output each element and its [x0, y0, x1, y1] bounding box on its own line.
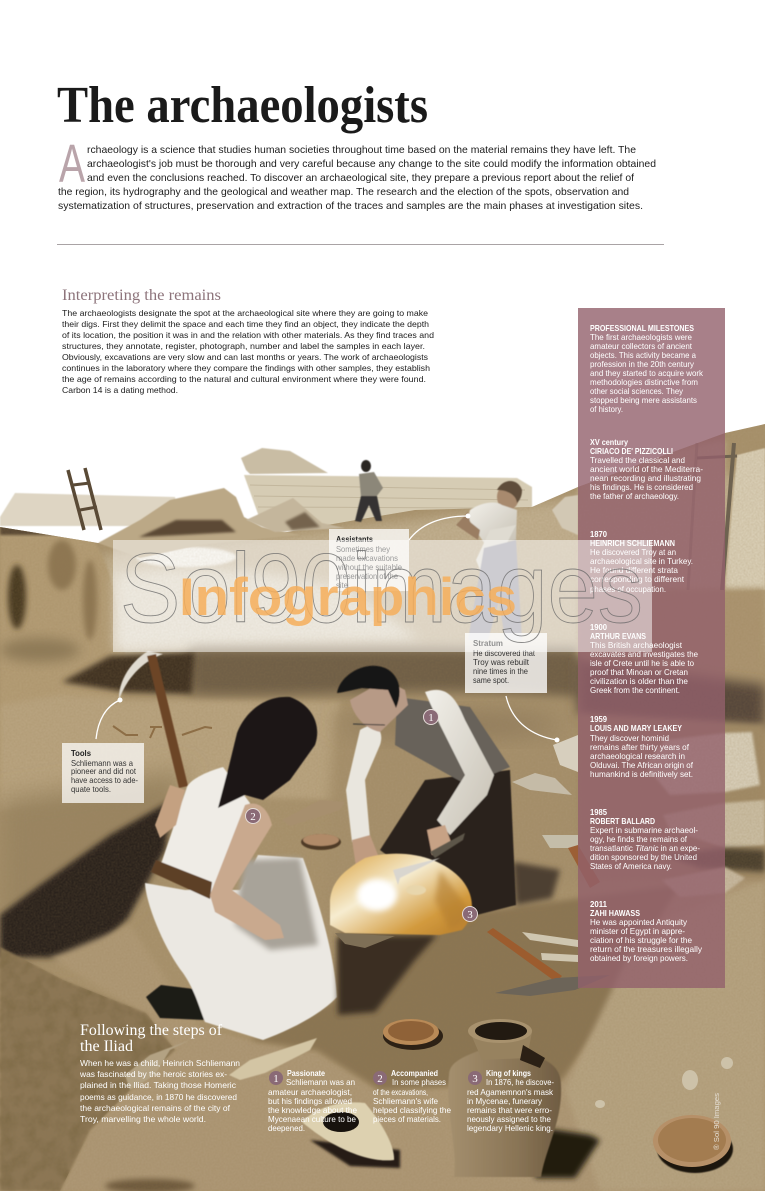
section text: interpreting the remains: Carbon 14 is a dating method.: [62, 385, 178, 395]
milestone: professional: PROFESSIONAL MILESTONES: [590, 323, 694, 333]
milestone: 1985: Expert in submarine archaeol-: [590, 825, 698, 835]
golden mask: [330, 833, 475, 935]
milestone: professional: profession in the 20th century: [590, 359, 695, 369]
milestone: 1900: Greek from the continent.: [590, 685, 680, 695]
milestone: 1985: transatlantic Titanic in an expe-: [590, 843, 700, 853]
milestone: 2011: ZAHI HAWASS: [590, 908, 640, 918]
section text: following the steps: plained in the Iliad. Taking those Homeric: [80, 1080, 236, 1090]
note 1: passionate: but his findings allowed: [268, 1096, 352, 1106]
milestone: 1900: This British archaeologist: [590, 640, 683, 650]
section heading: following the steps of the Iliad: Following the steps of: [80, 1022, 223, 1039]
note 3: king of kings: red Agamemnon's mask: [467, 1087, 554, 1097]
ladder left: [68, 468, 101, 530]
note 2: accompanied: Accompanied: [391, 1069, 438, 1078]
section text: following the steps: the archaeological remains of the city of: [80, 1103, 231, 1113]
plate right: [653, 1115, 733, 1173]
near sand: [0, 695, 340, 810]
right background: [725, 448, 765, 592]
note 2: accompanied: helped classifying the: [373, 1105, 451, 1115]
hammer bottom: [487, 928, 610, 996]
note 1: passionate: 1: [273, 1073, 279, 1085]
milestone: 1870: corresponding to different: [590, 574, 685, 584]
milestone: 1959: humankind is definitively set.: [590, 769, 693, 779]
pale sand behind watermark: [115, 569, 420, 650]
milestone: 1985: ROBERT BALLARD: [590, 816, 655, 826]
watermark: Sol90images: [120, 533, 643, 643]
callout: tools: Tools: [71, 748, 91, 758]
note 3: king of kings: legendary Hellenic king.: [467, 1123, 553, 1133]
drop cap: A: [59, 134, 85, 194]
callout: stratum: Troy was rebuilt: [473, 657, 530, 667]
mid ground: [328, 696, 570, 800]
section text: interpreting the remains: The archaeologists designate the spot at the archaeological site where they are going to make: [62, 308, 428, 318]
milestone: professional: other social sciences. They: [590, 386, 684, 396]
milestone: 1985: ogy, he finds the remains of: [590, 834, 688, 844]
note 1: passionate: Passionate: [287, 1069, 325, 1078]
top rock: [241, 448, 328, 474]
stone wall: [244, 475, 532, 528]
milestone: 1900: [590, 622, 698, 695]
milestone: 1870: He discovered Troy at an: [590, 547, 676, 557]
badge 2: [246, 808, 260, 824]
milestone: 1959: archaeological research in: [590, 751, 685, 761]
intro text block: rchaeology is a science that studies human societies throughout time based on the material remains they have left. The: [87, 144, 636, 156]
milestone: 1985: 1985: [590, 807, 607, 817]
callout: stratum: Stratum: [473, 638, 503, 648]
callout: tools: have access to ade-: [71, 775, 138, 785]
milestone: XV century: nean recording and illustrating: [590, 473, 701, 483]
intro text block: [58, 134, 656, 212]
callout: assistants: Assistants: [336, 534, 373, 544]
section text: interpreting the remains: of its location, the position it was in and the relation with other materials. As they find traces and: [62, 330, 434, 340]
milestone: 1870: [590, 529, 693, 594]
intro text block: systematization of structures, preservation and extraction of the traces and samples are the main phases at investigation sites.: [58, 200, 643, 212]
intro text block: and even the conclusions reached. To discover an archaeological site, they prepare a previous report about the relief of: [87, 172, 634, 184]
milestone: 2011: obtained by foreign powers.: [590, 953, 688, 963]
note 3: king of kings: King of kings: [486, 1069, 531, 1078]
callout: assistants: preservation of the: [336, 571, 398, 581]
milestone: 2011: 2011: [590, 899, 607, 909]
milestone: professional: methodologies distinctive from: [590, 377, 698, 387]
milestone: professional: amateur collectors of ancient: [590, 341, 693, 351]
dune left: [1, 527, 122, 702]
milestone: 1870: phases of occupation.: [590, 584, 666, 594]
milestone: 1870: He found different strata: [590, 565, 678, 575]
badge 2: 2: [250, 811, 256, 823]
note 2: accompanied: of the excavations,: [373, 1087, 428, 1097]
section text: interpreting the remains: continues in the laboratory where they compare the findings with other samples, they establish: [62, 363, 430, 373]
milestone: 1900: civilization is older than the: [590, 676, 688, 686]
pickaxe: [119, 651, 188, 788]
section text: interpreting the remains: structures, they annotate, register, photograph, number and label the samples in each layer.: [62, 341, 425, 351]
milestone: 1900: 1900: [590, 622, 607, 632]
right ladder: [688, 443, 737, 590]
intro text block: archaeologist's job must be thorough and very careful because any change to the site could modify the information obtained: [87, 158, 656, 170]
hammer right: [542, 835, 600, 888]
section text: interpreting the remains: Obviously, excavations are very slow and can last months or years. The work of archaeologists: [62, 352, 428, 362]
milestone: XV century: CIRIACO DE' PIZZICOLLI: [590, 446, 673, 456]
bottom bowl: [383, 1019, 443, 1050]
small worker at wall: [355, 460, 383, 522]
note 2: accompanied: 2: [377, 1073, 383, 1085]
lower sand: [158, 1024, 197, 1036]
note 3: king of kings: In 1876, he discove-: [486, 1077, 554, 1087]
milestone: 1959: [590, 714, 694, 779]
note 2: accompanied: In some phases: [392, 1077, 446, 1087]
callout: stratum: nine times in the: [473, 666, 528, 676]
woman archaeologist: [145, 697, 337, 1040]
note 2: accompanied: pieces of materials.: [373, 1114, 441, 1124]
milestone: 1870: HEINRICH SCHLIEMANN: [590, 538, 675, 548]
watermark: Infographics: [179, 568, 517, 627]
note 1: passionate: [268, 1069, 357, 1133]
copyright credit: ® Sol 90 Images: [712, 1093, 721, 1150]
section heading: following the steps of the Iliad: the Iliad: [80, 1038, 133, 1055]
milestone: XV century: his findings. He is considered: [590, 482, 693, 492]
note 1: passionate: Schliemann was an: [286, 1077, 355, 1087]
callout: assistants: made excavations: [336, 553, 398, 563]
section text: following the steps: [79, 1058, 240, 1124]
standing worker: [456, 481, 578, 640]
milestone: 1985: [590, 807, 700, 871]
excavation scene illustration: [0, 420, 765, 1191]
section text: following the steps: Troy, marvelling the whole world.: [80, 1114, 206, 1124]
textured dark ground: [253, 897, 614, 1092]
milestone: professional: The first archaeologists were: [590, 332, 692, 342]
milestone: XV century: the father of archaeology.: [590, 491, 679, 501]
callout: assistants: [329, 514, 470, 591]
ground: [0, 420, 765, 1191]
note 3: king of kings: in Mycenae, funerary: [467, 1096, 543, 1106]
callout: tools: Schliemann was a: [71, 758, 133, 768]
section text: interpreting the remains: the age of remains according to the natural and cultural environment where they were found.: [62, 374, 426, 384]
milestone: 2011: He was appointed Antiquity: [590, 917, 688, 927]
section text: interpreting the remains: their digs. First they delimit the space and each time they find an object, they indicate the depth: [62, 319, 429, 329]
milestone: 1900: ARTHUR EVANS: [590, 631, 646, 641]
callout: tools: [62, 698, 144, 803]
milestone: 1959: Olduvai. The African origin of: [590, 760, 694, 770]
milestone: XV century: Travelled the classical and: [590, 455, 685, 465]
stratum rock: [553, 735, 578, 772]
milestone: 2011: ciation of his struggle for the: [590, 935, 692, 945]
clay jar: [448, 1019, 600, 1178]
section text: interpreting the remains: [62, 308, 434, 395]
note 3: king of kings: 3: [472, 1073, 478, 1085]
milestone: 1959: They discover hominid: [590, 733, 669, 743]
milestone: 2011: return of the treasures illegally: [590, 944, 703, 954]
milestone: 1900: isle of Crete until he is able to: [590, 658, 694, 668]
section heading: following the steps of the Iliad: [80, 1022, 223, 1055]
title: The archaeologists: [57, 77, 428, 134]
callout: stratum: [465, 633, 560, 742]
note 1: passionate: deepened.: [268, 1123, 305, 1133]
callout: tools: quate tools.: [71, 784, 111, 794]
shadows near figures: [337, 862, 560, 1015]
badge 1: [424, 710, 438, 724]
section text: following the steps: poems as guidance, in 1870 he discovered: [80, 1092, 237, 1102]
note 3: king of kings: neously assigned to the: [467, 1114, 551, 1124]
callout: tools: pioneer and did not: [71, 766, 137, 776]
milestone: XV century: [590, 437, 703, 501]
note 1: passionate: Mycenaean culture to be: [268, 1114, 356, 1124]
tools right: [522, 932, 578, 962]
milestone: 2011: [590, 899, 703, 963]
note 1: passionate: amateur archaeologist,: [268, 1087, 352, 1097]
intro text block: the region, its hydrography and the geological and weather map. The research and the election of the spots, observation and: [58, 186, 629, 198]
milestone: 1959: remains after thirty years of: [590, 742, 690, 752]
rock left: [98, 488, 300, 558]
note 2: accompanied: Schliemann's wife: [373, 1096, 438, 1106]
note 1: passionate: the knowledge about the: [268, 1105, 357, 1115]
note 2: accompanied: [373, 1069, 451, 1124]
dark bands: [190, 648, 580, 700]
milestone: 1900: proof that Minoan or Cretan: [590, 667, 688, 677]
milestone: 1870: 1870: [590, 529, 607, 539]
figurine and plate: [282, 800, 345, 850]
rubble by mask: [335, 933, 395, 948]
milestone: 1870: archaeological site in Turkey.: [590, 556, 693, 566]
badge 1: 1: [428, 712, 434, 724]
note 3: king of kings: [467, 1069, 554, 1133]
milestone: professional: [590, 323, 704, 414]
milestone: professional: and they started to acquire work: [590, 368, 704, 378]
callout: stratum: He discovered that: [473, 648, 536, 658]
milestone: professional: objects. This activity became a: [590, 350, 696, 360]
section text: following the steps: When he was a child, Heinrich Schliemann: [80, 1058, 240, 1068]
section text: following the steps: was fascinated by the heroic stories ex-: [79, 1069, 227, 1079]
bone dagger: [125, 1038, 317, 1090]
note 3: king of kings: remains that were erro-: [467, 1105, 552, 1115]
milestone: professional: of history.: [590, 404, 623, 414]
callout: assistants: without the suitable: [335, 562, 402, 572]
milestone: 1985: dition sponsored by the United: [590, 852, 697, 862]
milestone: XV century: XV century: [590, 437, 628, 447]
badge 3: 3: [467, 909, 473, 921]
section heading: interpreting the remains: Interpreting the remains: [62, 287, 221, 304]
milestone: 2011: minister of Egypt in appre-: [590, 926, 685, 936]
panel: professional milestones sidebar: [578, 308, 725, 988]
milestone: 1959: LOUIS AND MARY LEAKEY: [590, 723, 682, 733]
small tools on ground: [113, 726, 212, 738]
milestone: professional: stopped being mere assistants: [590, 395, 697, 405]
callout: assistants: Sometimes they: [336, 544, 391, 554]
milestone: 1985: States of America navy.: [590, 861, 672, 871]
badge 3: [462, 906, 478, 922]
man archaeologist: [337, 666, 516, 918]
callout: stratum: same spot.: [473, 675, 509, 685]
milestone: 1900: excavates and investigates the: [590, 649, 698, 659]
milestone: 1959: 1959: [590, 714, 607, 724]
rock behind: [246, 498, 345, 532]
stones right: [595, 1057, 733, 1108]
dune bottom left: [0, 947, 175, 1191]
callout: assistants: site.: [336, 580, 350, 590]
broken pot: [302, 1102, 400, 1168]
milestone: XV century: ancient world of the Mediterra-: [590, 464, 703, 474]
far pale wall left: [0, 493, 180, 526]
